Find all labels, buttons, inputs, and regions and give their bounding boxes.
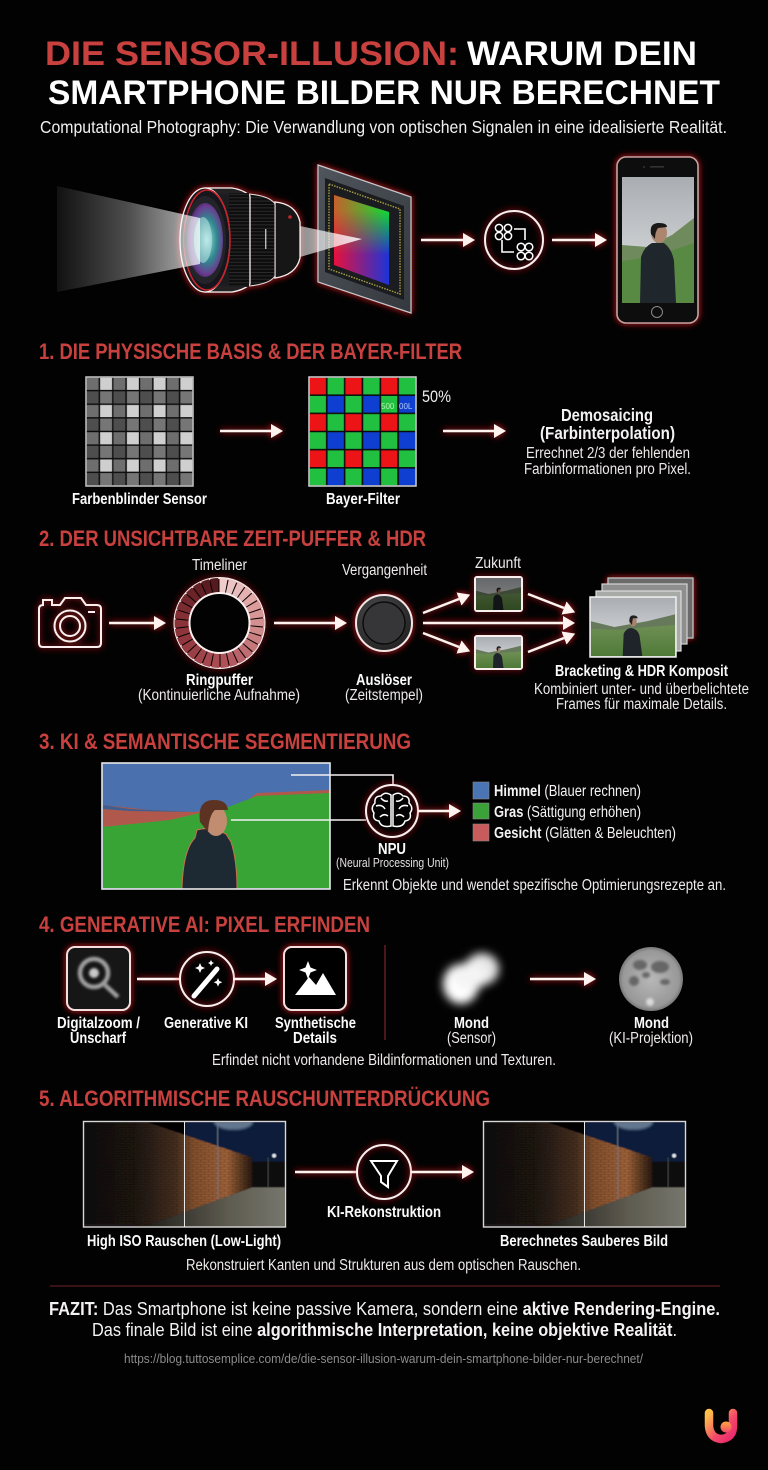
beam through sensor xyxy=(300,226,362,257)
demosaicing text: (Farbinterpolation) xyxy=(540,423,675,443)
label ringpuffer: Ringpuffer xyxy=(186,672,253,689)
label bracketing: Frames für maximale Details. xyxy=(556,696,727,713)
label high ISO: High ISO Rauschen (Low-Light) xyxy=(87,1233,281,1250)
demosaicing text: Farbinformationen pro Pixel. xyxy=(524,461,691,478)
label moon AI: Mond xyxy=(634,1015,669,1032)
title: WARUM DEIN xyxy=(467,35,697,73)
connector lines xyxy=(231,775,393,820)
HDR frame stack xyxy=(590,578,693,657)
icon: synthetic details xyxy=(284,947,346,1010)
arrow xyxy=(233,978,265,980)
legend: face: Gesicht (Glätten & Beleuchten) xyxy=(494,825,676,842)
arrow xyxy=(418,810,449,812)
arrow xyxy=(274,622,335,624)
label ringpuffer xyxy=(138,672,300,704)
panel: generative AI xyxy=(57,945,693,1069)
panel: noise reduction xyxy=(84,1114,686,1274)
caption: Rekonstruiert Kanten und Strukturen aus dem optischen Rauschen. xyxy=(186,1257,581,1274)
divider xyxy=(50,1285,720,1287)
legend: sky: Himmel (Blauer rechnen) xyxy=(494,783,641,800)
icon: camera lens xyxy=(180,188,300,292)
heading: section 1: 1. DIE PHYSISCHE BASIS & DER BAYER-FILTER xyxy=(39,339,462,364)
label: sensor: Farbenblinder Sensor xyxy=(72,491,207,508)
source url: https://blog.tuttosemplice.com/de/die-sensor-illusion-warum-dein-smartphone-bilder-nur-berechnet/ xyxy=(124,1352,643,1366)
label reconstruction: KI-Rekonstruktion xyxy=(327,1204,441,1221)
clean photo xyxy=(484,1114,686,1227)
title: DIE SENSOR-ILLUSION: xyxy=(45,35,459,73)
panel: semantic segmentation xyxy=(102,763,726,894)
heading: section 2: 2. DER UNSICHTBARE ZEIT-PUFFER & HDR xyxy=(39,526,426,551)
label moon sensor: (Sensor) xyxy=(447,1030,496,1047)
label vergangenheit: Vergangenheit xyxy=(342,562,428,579)
label bracketing: Bracketing & HDR Komposit xyxy=(555,663,729,680)
icon: filter funnel xyxy=(357,1145,411,1199)
line xyxy=(137,978,180,980)
arrow xyxy=(411,1171,462,1173)
label NPU xyxy=(336,841,449,870)
arrow xyxy=(530,978,584,980)
segmented photo xyxy=(102,763,330,889)
blurred moon xyxy=(443,953,499,1004)
legend xyxy=(473,782,676,842)
label ausloeser: Auslöser xyxy=(356,672,412,689)
heading: section 5: 5. ALGORITHMISCHE RAUSCHUNTERDRÜCKUNG xyxy=(39,1086,490,1111)
arrows to frames and composite xyxy=(423,594,564,652)
conclusion xyxy=(49,1299,720,1340)
bayer colour grid: 00L xyxy=(399,402,413,411)
noisy photo xyxy=(84,1114,286,1227)
label NPU: (Neural Processing Unit) xyxy=(336,856,449,870)
label: bayer: Bayer-Filter xyxy=(326,491,400,508)
title: SMARTPHONE BILDER NUR BERECHNET xyxy=(48,74,720,112)
icon: magic wand xyxy=(180,952,234,1006)
shutter button xyxy=(356,595,412,651)
label synthetic details xyxy=(275,1015,356,1047)
label zukunft: Zukunft xyxy=(475,555,522,572)
label ringpuffer: (Kontinuierliche Aufnahme) xyxy=(138,687,300,704)
demosaicing text: Demosaicing xyxy=(561,405,653,425)
icon: blurred zoom xyxy=(67,947,130,1010)
label moon sensor: Mond xyxy=(454,1015,489,1032)
conclusion: Das finale Bild ist eine algorithmische Interpretation, keine objektive Realität. xyxy=(92,1320,677,1340)
demosaicing text xyxy=(524,405,691,478)
icon: processing circle xyxy=(485,211,543,269)
label digitalzoom xyxy=(57,1015,140,1047)
arrow xyxy=(109,622,154,624)
label ausloeser xyxy=(345,672,423,704)
label synthetic details: Synthetische xyxy=(275,1015,356,1032)
panel: time buffer and HDR xyxy=(39,555,749,713)
label generative KI: Generative KI xyxy=(164,1015,248,1032)
colour-blind sensor grid xyxy=(86,377,193,486)
sharp moon xyxy=(619,947,683,1011)
label moon AI xyxy=(609,1015,693,1047)
caption: Erfindet nicht vorhandene Bildinformationen und Texturen. xyxy=(212,1052,556,1069)
legend: grass: Gras (Sättigung erhöhen) xyxy=(494,804,641,821)
conclusion: FAZIT: Das Smartphone ist keine passive Kamera, sondern eine aktive Rendering-Engine. xyxy=(49,1299,720,1319)
icon: image sensor xyxy=(318,165,411,313)
label synthetic details: Details xyxy=(293,1030,337,1047)
label ausloeser: (Zeitstempel) xyxy=(345,687,423,704)
label NPU: NPU xyxy=(378,841,406,858)
label digitalzoom: Digitalzoom / xyxy=(57,1015,140,1032)
label clean image: Berechnetes Sauberes Bild xyxy=(500,1233,668,1250)
demosaicing text: Errechnet 2/3 der fehlenden xyxy=(526,445,690,462)
light beam entering lens xyxy=(57,186,200,292)
panel: bayer filter xyxy=(72,377,691,508)
logo xyxy=(709,1413,733,1439)
label moon sensor xyxy=(447,1015,496,1047)
title xyxy=(45,35,720,112)
line xyxy=(295,1171,357,1173)
icon: smartphone with photo xyxy=(617,157,698,323)
label timeliner: Timeliner xyxy=(192,557,247,574)
arrow xyxy=(552,239,595,241)
bayer colour grid xyxy=(309,377,416,486)
ring buffer xyxy=(167,570,272,676)
arrow xyxy=(220,430,271,432)
label moon AI: (KI-Projektion) xyxy=(609,1030,693,1047)
thumbnail: past frame xyxy=(475,636,522,669)
label 50%: 50% xyxy=(422,387,451,406)
thumbnail: future frame xyxy=(475,577,522,611)
heading: section 4: 4. GENERATIVE AI: PIXEL ERFINDEN xyxy=(39,912,370,937)
icon: camera xyxy=(39,598,101,647)
heading: section 3: 3. KI & SEMANTISCHE SEGMENTIERUNG xyxy=(39,729,411,754)
bayer colour grid: 500 xyxy=(381,402,395,411)
hero pipeline xyxy=(57,157,698,323)
label bracketing xyxy=(534,663,749,713)
divider xyxy=(384,945,386,1040)
icon: NPU brain xyxy=(366,785,418,837)
arrow xyxy=(421,239,463,241)
arrow xyxy=(443,430,494,432)
label digitalzoom: Unscharf xyxy=(70,1030,127,1047)
